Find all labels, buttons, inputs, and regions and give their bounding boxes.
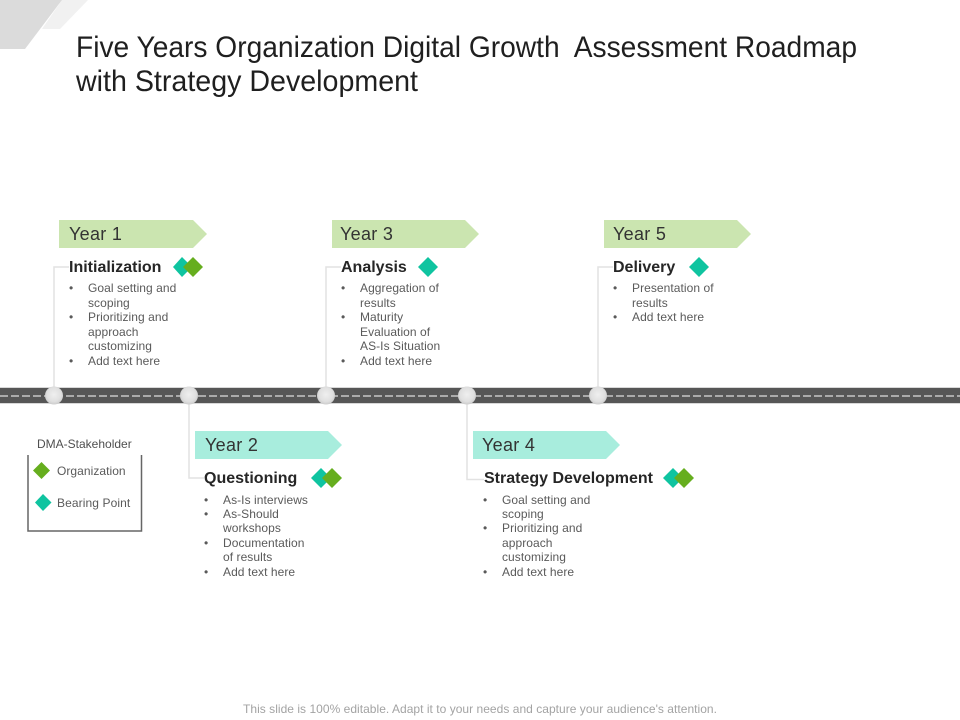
panel: year 1: Prioritizing and: [88, 310, 168, 324]
panel: year 3: Evaluation of: [360, 325, 431, 339]
panel: year 1: •: [69, 310, 73, 324]
panel: year 3: •: [341, 354, 345, 368]
panel: year 5: [604, 220, 751, 324]
legend: DMA-Stakeholder: Bearing Point: [57, 496, 131, 510]
panel: year 5: results: [632, 296, 668, 310]
panel: year 5: •: [613, 310, 617, 324]
timeline nodes: [45, 386, 607, 404]
legend: DMA-Stakeholder: Organization: [57, 464, 126, 478]
panel: year 4: scoping: [502, 507, 544, 521]
panel: year 1: •: [69, 281, 73, 295]
decorative corner shape: [0, 0, 88, 49]
legend: DMA-Stakeholder: DMA-Stakeholder: [37, 437, 132, 451]
panel: year 4: •: [483, 565, 487, 579]
panel: year 5: Add text here: [632, 310, 704, 324]
panel: year 2: Documentation: [223, 536, 304, 550]
panel: year 2: •: [204, 536, 208, 550]
panel: year 1: scoping: [88, 296, 130, 310]
panel: year 2: workshops: [222, 521, 281, 535]
panel: year 2: Year 2: [205, 435, 258, 455]
timeline road: [0, 387, 960, 404]
panel: year 4: Prioritizing and: [502, 521, 582, 535]
panel: year 4: Strategy Development: [484, 470, 654, 487]
panel: year 3: AS-Is Situation: [360, 339, 440, 353]
panel: year 2: •: [204, 493, 208, 507]
panel: year 2: of results: [223, 550, 272, 564]
panel: year 4: approach: [502, 536, 553, 550]
panel: year 3: results: [360, 296, 396, 310]
panel: year 1: Initialization: [69, 259, 161, 276]
title: Five Years Organization Digital Growth Assessment Roadmap: [76, 31, 857, 64]
connector lines: [54, 267, 613, 480]
panel: year 4: Add text here: [502, 565, 574, 579]
panel: year 3: Analysis: [341, 259, 407, 276]
legend: DMA-Stakeholder: [28, 437, 142, 531]
panel: year 5: Year 5: [613, 224, 666, 244]
title: with Strategy Development: [75, 65, 419, 98]
panel: year 2: As-Should: [223, 507, 279, 521]
panel: year 2: [195, 431, 342, 579]
footer note: This slide is 100% editable. Adapt it to your needs and capture your audience's attention.: [243, 702, 717, 716]
panel: year 4: Year 4: [482, 435, 535, 455]
panel: year 5: Delivery: [613, 259, 675, 276]
panel: year 3: Year 3: [340, 224, 393, 244]
panel: year 3: •: [341, 281, 345, 295]
panel: year 5: Presentation of: [632, 281, 714, 295]
panel: year 2: •: [204, 507, 208, 521]
panel: year 1: •: [69, 354, 73, 368]
panel: year 4: •: [483, 493, 487, 507]
panel: year 2: As-Is interviews: [223, 493, 308, 507]
panel: year 3: •: [341, 310, 345, 324]
panel: year 1: Year 1: [69, 224, 122, 244]
panel: year 4: Goal setting and: [502, 493, 590, 507]
panel: year 4: customizing: [502, 550, 566, 564]
panel: year 3: Add text here: [360, 354, 432, 368]
panel: year 1: customizing: [88, 339, 152, 353]
panel: year 4: •: [483, 521, 487, 535]
panel: year 1: [59, 220, 207, 368]
title: [75, 31, 857, 98]
panel: year 5: •: [613, 281, 617, 295]
panel: year 2: •: [204, 565, 208, 579]
panel: year 4: [473, 431, 694, 579]
panel: year 1: Goal setting and: [88, 281, 176, 295]
panel: year 2: Add text here: [223, 565, 295, 579]
panel: year 3: Aggregation of: [360, 281, 440, 295]
panel: year 2: Questioning: [204, 470, 297, 487]
panel: year 3: Maturity: [360, 310, 403, 324]
panel: year 1: Add text here: [88, 354, 160, 368]
panel: year 3: [332, 220, 479, 368]
panel: year 1: approach: [88, 325, 139, 339]
